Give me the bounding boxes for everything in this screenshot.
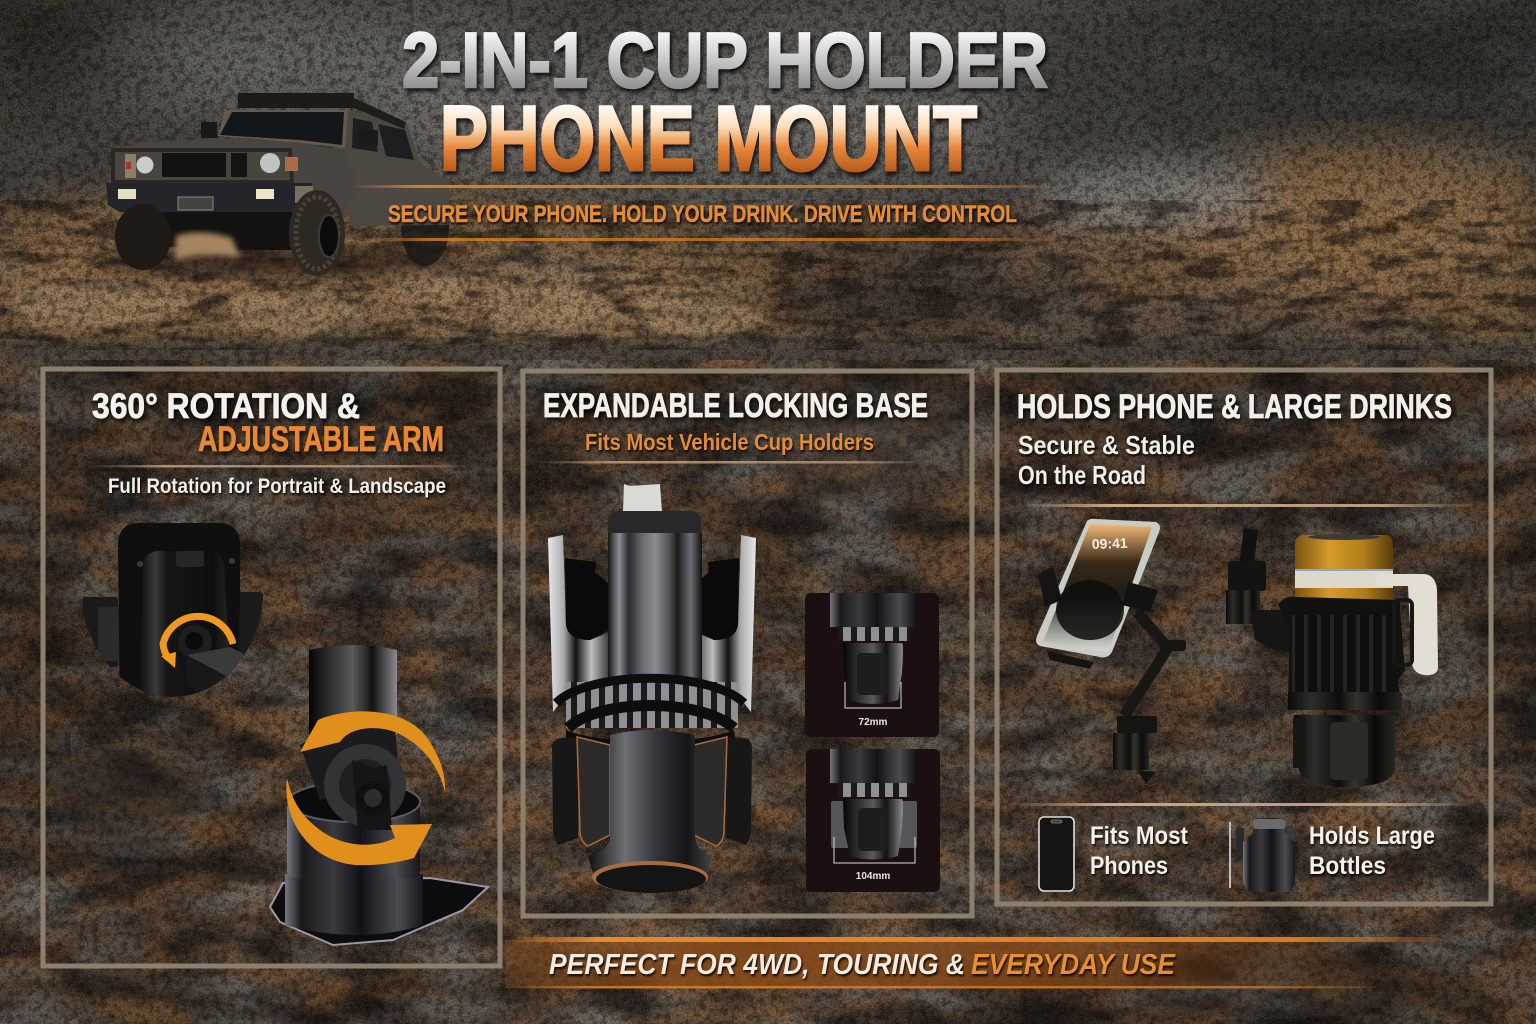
inset: 104mm position	[806, 749, 940, 892]
panel: expandable locking base	[523, 371, 972, 916]
label: fits most phones	[1090, 822, 1189, 880]
subheading: Secure & Stable	[1018, 430, 1195, 460]
product: swivel joint with rotation arrows	[270, 645, 488, 945]
heading: 360 rotation: 360° ROTATION &	[92, 387, 360, 426]
panel: 360 rotation and adjustable arm	[43, 369, 500, 966]
tagline with rules: SECURE YOUR PHONE. HOLD YOUR DRINK. DRIVE WITH CONTROL	[388, 201, 1017, 228]
title line: 2-in-1 cup holder: 2-IN-1 CUP HOLDER	[402, 16, 1048, 104]
product wing: left	[548, 535, 610, 712]
product claw: right	[694, 737, 752, 846]
inset: 72mm position	[805, 593, 939, 737]
banner: perfect for 4WD: PERFECT FOR 4WD, TOURING &	[549, 949, 965, 981]
icon: bottle holder	[1229, 818, 1295, 892]
product: phone on mount arm	[1036, 519, 1186, 784]
title	[402, 16, 1048, 190]
icon: phone outline	[1039, 817, 1074, 891]
product: bottle in cup holder	[1226, 528, 1438, 787]
product: expandable cup holder base	[548, 484, 756, 893]
panel: holds phone and large drinks	[997, 370, 1491, 904]
phone clock text: 09:41	[1092, 535, 1128, 552]
vehicle: off-road truck on rocks	[90, 93, 470, 278]
subheading: On the Road	[1018, 460, 1146, 490]
heading: adjustable arm: ADJUSTABLE ARM	[198, 420, 444, 459]
product claw: left	[552, 737, 610, 846]
subheading: Fits Most Vehicle Cup Holders	[585, 429, 874, 455]
banner: perfect for 4WD	[505, 937, 1435, 988]
icon: lower rotation arrow	[286, 778, 432, 865]
label: holds large bottles	[1309, 822, 1435, 880]
icon: upper rotation arrow	[300, 711, 445, 792]
label: holds large bottles: Holds Large	[1309, 822, 1435, 850]
tagline with rules	[350, 185, 1055, 241]
subheading	[1018, 430, 1195, 490]
banner: perfect for 4WD: EVERYDAY USE	[971, 949, 1177, 981]
label: holds large bottles: Bottles	[1309, 852, 1386, 880]
dimension label: 72mm	[859, 717, 888, 728]
title line: phone mount: PHONE MOUNT	[440, 88, 977, 190]
subheading: full rotation: Full Rotation for Portrait & Landscape	[108, 475, 446, 498]
dimension label: 104mm	[856, 871, 890, 882]
label: fits most phones: Phones	[1090, 852, 1168, 880]
label: fits most phones: Fits Most	[1090, 822, 1189, 850]
product wing: right	[694, 535, 756, 712]
heading: EXPANDABLE LOCKING BASE	[543, 387, 928, 425]
product: phone holder back with rotation arrow	[82, 523, 263, 697]
